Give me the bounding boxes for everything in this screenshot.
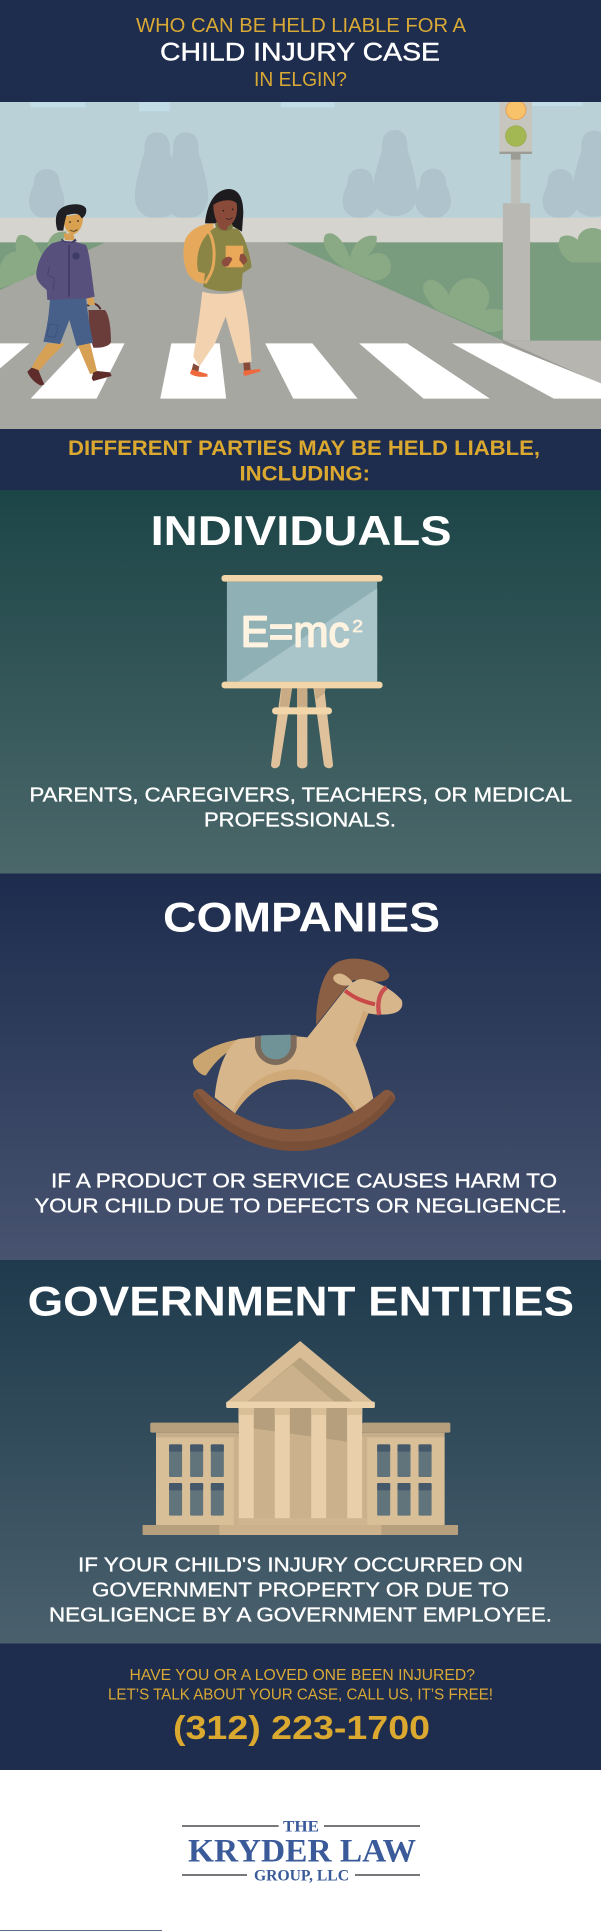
logo: the kryder law group [182,1819,420,1885]
panel: individuals [0,490,601,874]
subheading band [0,429,601,490]
description: individuals line 2: PROFESSIONALS. [204,810,396,832]
icon: rocking horse [193,959,402,1151]
description: individuals line 1: PARENTS, CAREGIVERS, TEACHERS, OR MEDICAL [30,785,572,807]
description: companies line 1: IF A PRODUCT OR SERVICE CAUSES HARM TO [51,1170,557,1192]
title line 1: WHO CAN BE HELD LIABLE FOR A [136,14,466,37]
call to action line 1: HAVE YOU OR A LOVED ONE BEEN INJURED? [130,1667,475,1684]
logo word: group, llc: GROUP, LLC [254,1868,349,1885]
heading: individuals: INDIVIDUALS [151,507,452,554]
header banner [0,0,601,102]
description: government line 1: IF YOUR CHILD'S INJURY OCCURRED ON [78,1555,523,1577]
panel: companies [0,874,601,1260]
logo word: the: THE [283,1819,319,1836]
icon: easel with blackboard [222,575,383,768]
boy walking [27,204,112,386]
description: government line 3: NEGLIGENCE BY A GOVERNMENT EMPLOYEE. [49,1605,552,1627]
windows [169,1444,432,1516]
description: companies line 2: YOUR CHILD DUE TO DEFECTS OR NEGLIGENCE. [34,1196,567,1218]
illustration: children on a crosswalk [0,100,601,430]
subheading line 2: INCLUDING: [240,463,370,486]
bushes [0,228,601,332]
formula exponent: 2 [352,616,363,636]
icon: government building [143,1341,458,1535]
blackboard formula: E=mc [241,608,350,656]
girl walking with backpack [183,189,261,377]
heading: companies: COMPANIES [163,894,440,941]
background trees [29,130,601,218]
call to action band [0,1644,601,1770]
description: government line 2: GOVERNMENT PROPERTY OR DUE TO [92,1580,509,1602]
heading: government entities: GOVERNMENT ENTITIES [28,1278,574,1325]
title line 3: IN ELGIN? [254,68,347,91]
panel: government entities [0,1260,601,1644]
crosswalk stripes [0,343,601,399]
call to action line 2: LET’S TALK ABOUT YOUR CASE, CALL US, IT’S FREE! [108,1686,493,1703]
logo word: kryder law: KRYDER LAW [188,1834,416,1870]
title line 2: CHILD INJURY CASE [160,39,440,67]
traffic light [499,100,532,341]
phone number: (312) 223-1700 [173,1709,430,1746]
subheading line 1: DIFFERENT PARTIES MAY BE HELD LIABLE, [68,437,540,460]
